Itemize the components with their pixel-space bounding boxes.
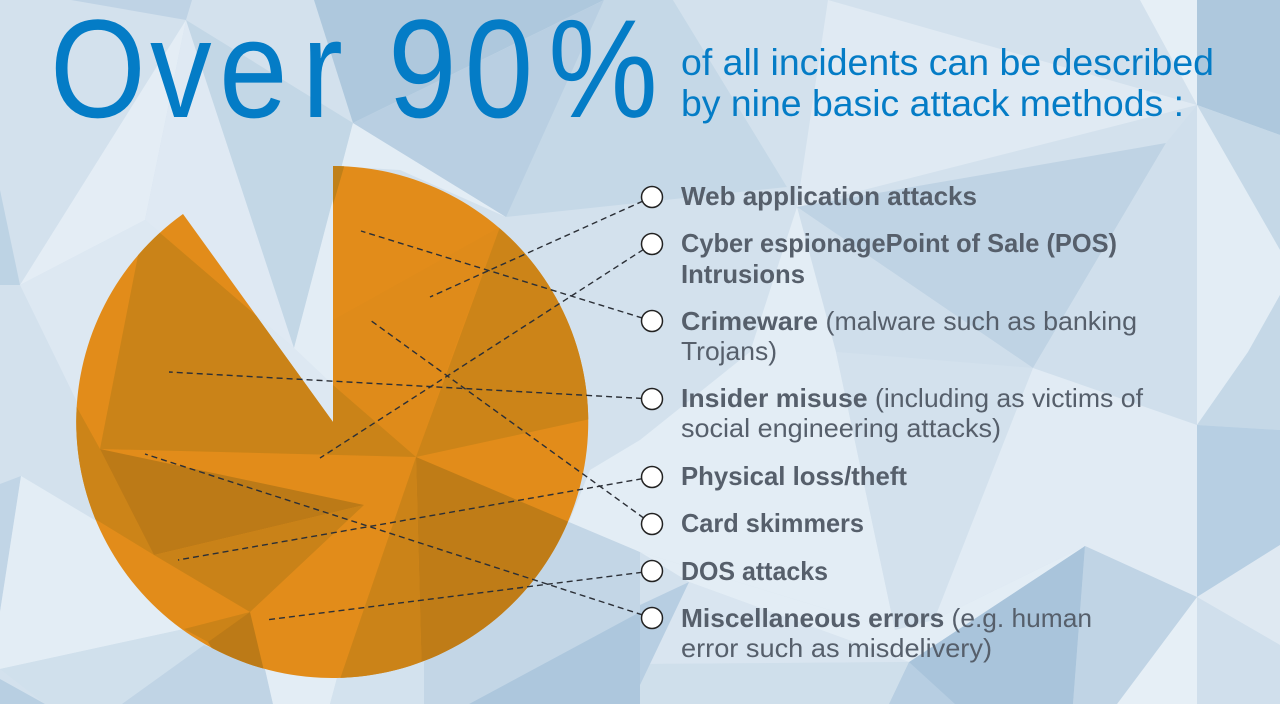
subtitle <box>681 42 1214 124</box>
subtitle: of all incidents can be described <box>681 42 1214 83</box>
chart: pie with missing wedge <box>60 160 600 682</box>
list item: Insider misuse: Insider misuse (including as victims of <box>681 383 1144 413</box>
list item: Cyber espionage / POS <box>642 228 1117 289</box>
list item: Physical loss/theft: Physical loss/theft <box>681 461 907 491</box>
list item: Insider misuse <box>642 383 1144 443</box>
connector lines <box>145 197 652 620</box>
list item: Crimeware: Trojans) <box>681 336 777 366</box>
list item: Card skimmers: Card skimmers <box>681 508 864 538</box>
list item: Web application attacks: Web application attacks <box>681 181 977 211</box>
list item: Insider misuse: social engineering attacks) <box>681 413 1001 443</box>
list item: DOS attacks: DOS attacks <box>681 556 828 586</box>
subtitle: by nine basic attack methods : <box>681 83 1184 124</box>
list item: Crimeware <box>642 306 1137 366</box>
list item: Cyber espionage / POS: Cyber espionagePoint of Sale (POS) <box>681 228 1117 258</box>
list item: Miscellaneous errors <box>642 603 1092 663</box>
list item: Miscellaneous errors: error such as misdelivery) <box>681 633 992 663</box>
list item: Cyber espionage / POS: Intrusions <box>681 259 805 289</box>
list item: Crimeware: Crimeware (malware such as banking <box>681 306 1137 336</box>
list item: Miscellaneous errors: Miscellaneous errors (e.g. human <box>681 603 1092 633</box>
